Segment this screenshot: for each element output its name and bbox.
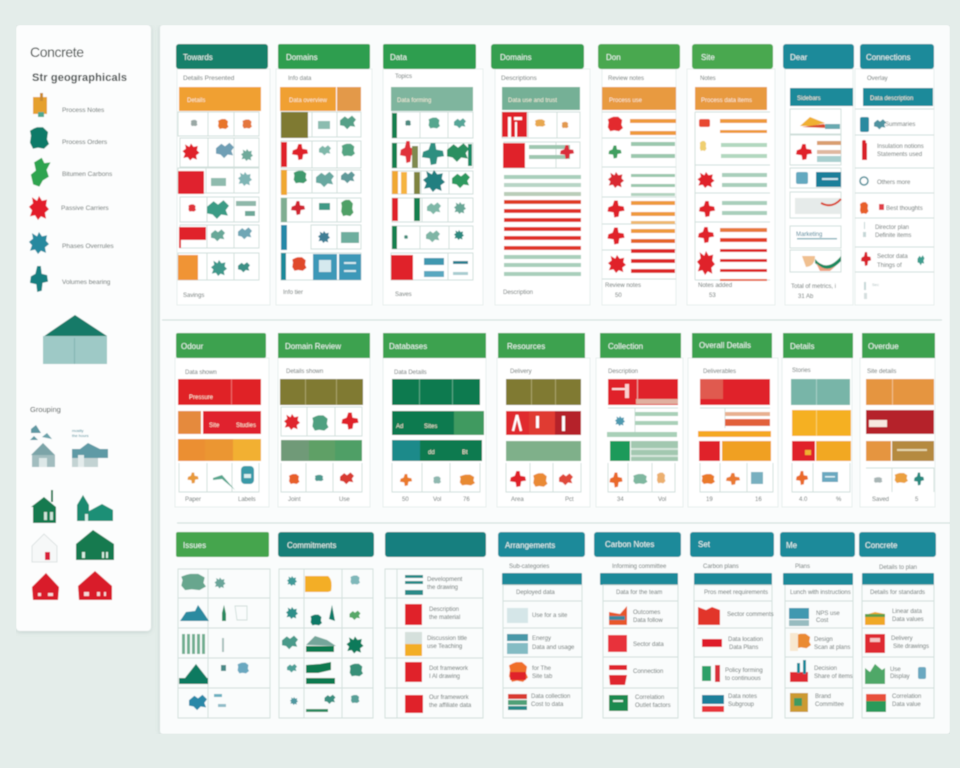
panel: left legend sidebar [16,25,151,631]
item list: Scan at plans [814,645,850,651]
card: row 1 column 1 [176,44,270,305]
card: row 1 column 1: Savings [183,293,204,299]
card: row 2 column 1: Paper [185,497,201,503]
icons: white house and green house [32,530,114,562]
item list: Policy forming [725,668,763,674]
colour rows: Ad [396,424,403,430]
card: row 1 column 6 [687,44,775,305]
item list: Data value [892,702,921,708]
card: row 1 column 1: Towards [183,53,213,62]
item list [600,573,678,718]
icons: green houses [31,490,113,523]
item list: Data Plans [729,645,758,651]
orange table head: Process use [609,98,643,104]
item list [862,573,934,718]
card: row 1 column 2: Info data [288,76,312,82]
colour rows: Pressure [189,395,214,401]
icon row [506,463,581,492]
card: row 1 column 2: Info tier [283,290,303,296]
sage table head [502,87,580,110]
icons: grey houses: the hours [72,433,89,438]
card: row 1 column 3: Data [390,53,407,62]
striped data rows [504,175,581,276]
card: row 1 column 1: Details [187,98,205,104]
orange table head [695,87,767,110]
card: row 2 column 2: Joint [288,497,301,503]
teal table head [863,88,933,106]
item list: Data collection [531,694,570,700]
sidebar grouping label: Grouping [30,405,61,414]
footer text: Total of metrics, i [791,284,836,290]
card: row 3 column 3 [385,532,486,718]
header [176,44,268,69]
sage table head [391,87,473,111]
item list: Discussion title [427,636,468,642]
colour rows [866,379,934,461]
card: row 2 column 3: Data Details [394,370,427,376]
card: row 3 column 1 [176,532,270,718]
card: row 2 column 8: 5 [915,497,919,503]
card: row 2 column 3 [383,333,486,507]
icons: grey houses: mostly [72,428,84,433]
item list: Development [427,577,463,583]
item list [783,573,853,718]
card: row 3 column 5 [594,532,681,718]
item list: Correlation [635,695,664,701]
colour rows: Bt [462,450,468,456]
item list: Energy [532,636,551,642]
card: row 2 column 6: 19 [706,497,713,503]
card: row 2 column 4: Delivery [510,369,532,375]
icon row [392,463,480,492]
item list: Data location [728,637,763,643]
card: row 1 column 6: Notes added [698,283,732,289]
item list: for The [532,666,552,672]
item list: to continuous [725,676,761,682]
card: row 2 column 7: Details [790,342,814,351]
description rows: Sec [872,282,879,287]
chart rows: Marketing [796,232,822,238]
description rows: Definite items [875,233,911,239]
item list: Sector data [633,642,664,648]
description rows: Summaries [885,122,915,128]
card: row 1 column 5: Review notes [608,76,644,82]
sidebar subtitle: Str geographicals [32,72,127,84]
card: row 1 column 6: Site [701,53,715,62]
orange table head: Process data items [701,98,752,104]
card: row 3 column 8: Details to plan [879,565,917,571]
card: row 1 column 5: Don [606,53,621,62]
card: row 2 column 4: Area [511,497,524,503]
item list: Dot framework [429,666,469,672]
card: row 2 column 3: Vol [433,497,441,503]
legend: process icons and labels: Bitumen Carbons [62,171,113,178]
colour rows [178,379,261,461]
card: row 2 column 4: Resources [507,342,545,351]
card: row 1 column 2 [276,44,372,305]
card: row 2 column 2: Use [339,497,350,503]
card: row 1 column 6: Notes [700,76,716,82]
colour rows [280,379,363,461]
footer text: 31 Ab [798,294,814,300]
item list: Decision [814,666,837,672]
card: row 2 column 5: Collection [608,342,643,351]
legend: process icons and labels: Volumes bearing [62,279,111,286]
card: row 2 column 5: Vol [658,497,666,503]
item list: Data notes [728,694,757,700]
icons: red houses [32,571,112,600]
description rows: Others more [877,180,911,186]
colour rows [791,379,851,461]
card: row 2 column 4 [497,333,590,507]
card: row 1 column 7 [783,44,854,305]
sage table head: Data use and trust [508,98,557,104]
icon row [179,463,259,492]
card: row 3 column 4 [498,532,585,718]
item list: Delivery [891,636,913,642]
card: row 3 column 8: Concrete [865,541,898,550]
legend: process icons and labels: Phases Overrules [62,243,114,250]
card: row 2 column 6 [688,333,778,507]
card: row 2 column 4: Pct [565,497,574,503]
description rows: Insulation notions [877,144,924,150]
card: row 3 column 2: Commitments [287,541,336,550]
card: row 2 column 3: 50 [402,497,409,503]
card: row 2 column 1: Odour [181,342,204,351]
description rows: Things of [877,263,902,269]
card: row 1 column 4: Descriptions [501,75,538,82]
map grid [178,569,270,718]
item list: Data for the team [616,590,662,596]
card: row 1 column 8: Overlay [867,76,888,82]
description rows: Best thoughts [886,206,923,212]
card: row 1 column 7: Dear [790,53,808,62]
colour rows: Sites [424,424,437,430]
card: row 1 column 8 [855,44,934,305]
item list: Our framework [429,695,470,701]
item list: Cost [816,618,829,624]
card: row 1 column 5: 50 [615,293,622,299]
item list: Display [890,674,910,680]
teal table head: Data description [870,96,913,102]
icon row [608,463,675,492]
item list: Deployed data [516,590,555,596]
card: row 2 column 8 [860,333,935,507]
item list: Data values [892,617,924,623]
colour rows [392,379,484,461]
card: row 1 column 8: Connections [866,53,910,62]
card: row 3 column 6 [690,532,774,718]
colour rows [506,379,581,461]
footer text [791,284,836,300]
card: row 2 column 5 [596,333,683,507]
card: row 3 column 4: Sub-categories [509,564,549,570]
card: row 2 column 7: Stories [792,368,811,374]
icons: grey houses [30,425,108,467]
card: row 3 column 7: Me [786,541,798,550]
card: row 1 column 2: Domains [286,53,318,62]
orange table head: Data overview [289,98,328,104]
teal table head [790,88,853,106]
card: row 2 column 5: 34 [617,497,624,503]
item list: Use for a site [532,613,568,619]
item list: Design [814,637,833,643]
item list: Pros meet requirements [704,590,768,596]
colour rows: Studies [236,423,256,429]
card: row 2 column 7: 4.0 [799,497,808,503]
item list: the material [429,615,460,621]
card: row 2 column 7 [782,333,853,507]
item list: Correlation [892,694,921,700]
card: row 2 column 6: Deliverables [703,369,736,375]
icon row [866,468,934,492]
card: row 3 column 7 [780,532,855,718]
item list [502,573,582,718]
card: row 2 column 3: 76 [463,497,470,503]
card: row 1 column 4 [491,44,590,305]
icon table [281,112,361,280]
card: row 3 column 7: Plans [795,564,810,570]
card: row 3 column 6: Carbon plans [703,564,739,570]
item list: Lunch with instructions [790,590,851,596]
colour rows: Site [209,423,220,429]
legend: process icons and labels [27,93,114,292]
card: row 3 column 6: Set [698,540,711,549]
card: row 2 column 2 [278,333,370,507]
item list: Outlet factors [635,703,671,709]
item list: use Teaching [427,644,462,650]
teal table head: Sidebars [797,96,821,102]
card: row 2 column 6: Overall Details [699,341,751,350]
item list: Connection [633,669,663,675]
sidebar title: Concrete [30,44,84,60]
item list: Use [890,667,901,673]
icon table [178,112,259,280]
card: row 2 column 5: Description [608,369,638,375]
icon row [700,463,773,492]
card: row 2 column 1: Labels [238,497,256,503]
item list [694,573,774,718]
chart rows [790,109,841,272]
item list: Committee [815,702,845,708]
icon and bar rows [602,112,676,279]
card: row 1 column 3: Saves [395,292,412,298]
colour rows: dd [428,450,435,456]
card: row 2 column 8: Saved [872,497,889,503]
item list: Data follow [633,618,663,624]
card: row 1 column 6: 53 [709,293,716,299]
card: row 1 column 3 [383,44,483,305]
panel: main matrix board [160,25,950,734]
card: row 3 column 5: Carbon Notes [605,540,654,549]
description rows: Director plan [875,225,909,231]
card: row 3 column 8 [859,532,936,718]
legend: process icons and labels: Process Orders [62,139,108,146]
item list: Brand [815,694,831,700]
item list: Outcomes [633,610,660,616]
card: row 2 column 7: % [836,497,842,503]
card: row 2 column 2: Details shown [286,369,323,375]
orange table head [179,87,261,111]
map grid [279,569,373,718]
legend: process icons and labels: Passive Carriers [61,205,109,212]
item list: Data and usage [532,645,575,651]
item list: Subgroup [728,702,755,708]
item list: Site drawings [893,644,929,650]
card: row 3 column 2 [278,532,374,718]
card: row 1 column 5: Review notes [605,283,641,289]
top icon rows [502,112,580,168]
icon table [391,112,473,280]
orange table head [280,87,361,111]
item list: the drawing [427,585,458,591]
item list: Share of items [814,674,853,680]
sage table head: Data forming [397,98,431,104]
icon row [792,463,850,492]
item list: I Al drawing [429,674,460,680]
description rows [855,109,934,299]
card: row 1 column 4: Domains [500,53,532,62]
description rows: Sector data [877,254,908,260]
card: row 2 column 6: 16 [755,497,762,503]
card: row 3 column 1: Issues [183,541,206,550]
icon and bar rows [695,112,770,281]
card: row 1 column 4: Description [503,290,533,296]
card: row 2 column 1 [175,333,269,507]
item list: Cost to data [531,702,564,708]
card: row 2 column 8: Site details [867,369,896,375]
item list: NPS use [816,611,840,617]
card: row 2 column 2: Domain Review [285,342,341,351]
legend: process icons and labels: Process Notes [62,107,105,114]
card: row 2 column 1: Data shown [185,370,217,376]
icon row [281,463,362,492]
item list: Details for standards [870,590,925,596]
item list: Description [429,607,459,613]
row separator [162,320,950,523]
item list [385,569,483,718]
orange table head [602,87,676,110]
item list: Site tab [532,674,553,680]
card: row 1 column 1: Details Presented [183,75,235,82]
card: row 1 column 3: Topics [395,74,412,80]
colour rows [698,379,771,461]
item list: the affiliate data [429,703,472,709]
card: row 3 column 4: Arrangements [505,541,555,550]
card: row 2 column 8: Overdue [868,342,899,351]
icon: large house [43,315,107,364]
card: row 3 column 5: Informing committee [612,564,667,570]
card: row 2 column 3: Databases [389,342,427,351]
colour rows [607,379,678,461]
description rows: Statements used [877,152,922,158]
item list: Linear data [892,609,923,615]
card: row 1 column 5 [598,44,680,305]
item list: Sector comments [727,612,774,618]
